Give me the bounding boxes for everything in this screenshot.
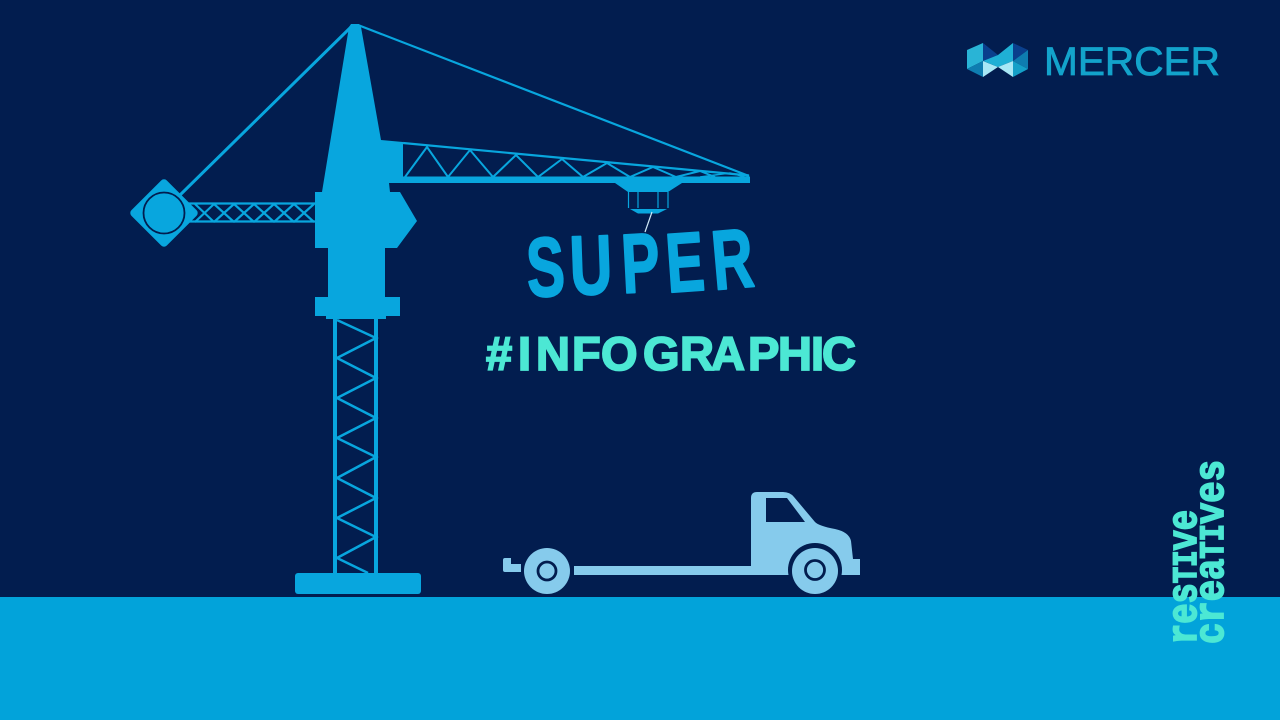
crane tower body [315,24,417,319]
truck [503,492,860,597]
crane [129,24,750,594]
rear hitch [503,558,521,572]
lattice mast [335,318,376,574]
crane cables [178,25,749,197]
SUPER word: P [619,216,662,312]
counterweight [129,178,199,248]
Mercer logo [967,40,1220,84]
cab window [766,498,805,522]
counter jib lattice [188,204,316,222]
restive creatives logo: resTIve [1161,510,1209,644]
restive creatives logo: creaTIves [1188,460,1236,644]
front wheel [786,543,844,597]
trolley and hook block [615,183,682,214]
SUPER word: R [708,212,757,308]
ground [0,597,1280,720]
logo mark [967,43,1028,77]
SUPER word: U [568,218,614,313]
truck cab and chassis [574,492,860,575]
#INFOGRAPHIC heading: #INFOGRAPHIC [486,327,856,380]
SUPER word [524,212,757,316]
SUPER word: E [663,215,707,311]
hook cable [645,212,652,232]
logo wordmark: MERCER [1044,40,1220,84]
SUPER word: S [524,220,567,316]
crane base [295,573,421,594]
rear wheel [524,548,570,594]
main jib [400,143,750,183]
restive creatives logo [1161,460,1236,644]
